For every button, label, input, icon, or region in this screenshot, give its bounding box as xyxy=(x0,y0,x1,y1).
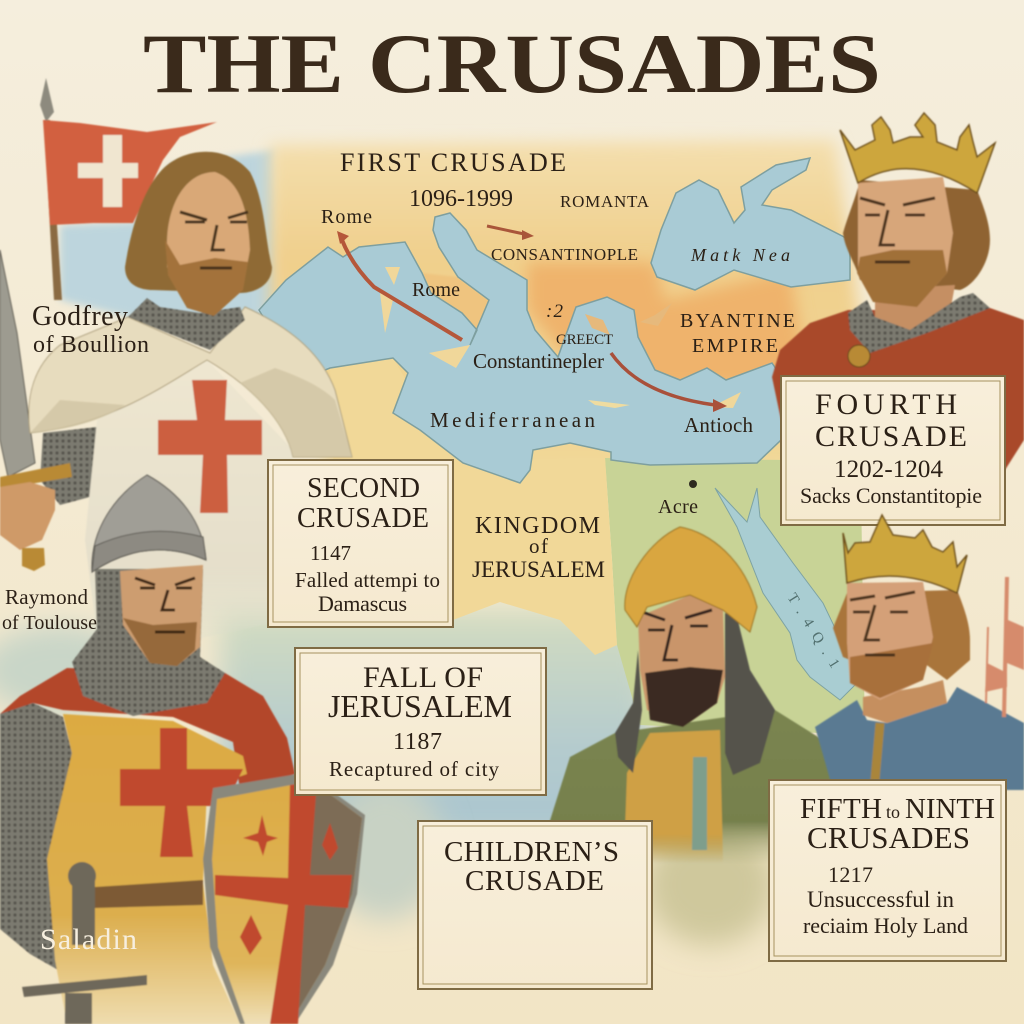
sword xyxy=(22,862,147,1024)
shield stars xyxy=(240,815,338,955)
pommel xyxy=(22,548,45,571)
heading: to xyxy=(886,802,900,822)
body text: 1187 xyxy=(393,729,442,755)
collar xyxy=(848,293,990,353)
label: Rome xyxy=(321,206,372,228)
body text: 1202-1204 xyxy=(834,456,944,483)
body text: Damascus xyxy=(318,591,407,616)
label: Acre xyxy=(658,496,698,518)
body text: 1217 xyxy=(828,862,873,887)
heading xyxy=(800,793,995,855)
red cape xyxy=(0,668,295,790)
flag pole xyxy=(44,120,62,300)
name: Raymond xyxy=(2,585,97,634)
body text: Recaptured of city xyxy=(329,757,500,781)
beard xyxy=(645,667,723,727)
beard xyxy=(165,240,248,316)
arrow head: central xyxy=(522,230,534,240)
body text xyxy=(803,862,968,938)
rope xyxy=(875,723,880,780)
blue cape xyxy=(815,687,1024,790)
body text: Falled attempi to xyxy=(295,568,440,592)
heading xyxy=(815,388,967,453)
robe centre xyxy=(625,730,723,863)
eyes and brows xyxy=(180,212,248,268)
label: GREECT xyxy=(556,332,613,348)
map: Mediterranean sea xyxy=(259,213,781,483)
hood left xyxy=(615,650,642,773)
arrow: route to Antioch xyxy=(611,353,715,405)
shield xyxy=(203,772,365,1024)
body text xyxy=(295,541,440,616)
flag cross xyxy=(78,135,138,207)
clasp xyxy=(848,345,870,367)
name: Raymond: of Toulouse xyxy=(2,612,97,634)
name: Raymond: Raymond xyxy=(5,585,88,609)
tunic xyxy=(85,360,293,660)
figure: Godfrey of Bouillon xyxy=(0,78,352,660)
crown xyxy=(843,515,967,593)
map: orange north xyxy=(527,262,810,390)
neck xyxy=(863,680,947,723)
map labels xyxy=(321,148,842,671)
label: 1096-1999 xyxy=(409,186,513,212)
map: Aegean land xyxy=(585,303,672,335)
heading: CHILDREN’S xyxy=(444,836,619,868)
panel: fifth to ninth crusades xyxy=(769,780,1006,961)
face xyxy=(638,595,725,727)
label: Matk Nea xyxy=(690,245,790,265)
red cross xyxy=(158,380,262,513)
heading xyxy=(297,473,429,534)
panel: second crusade xyxy=(268,460,453,627)
cloak xyxy=(29,307,352,457)
body text: Sacks Constantitopie xyxy=(800,483,982,508)
label: EMPIRE xyxy=(692,335,778,357)
label: BYANTINE xyxy=(680,310,795,332)
label: KINGDOM xyxy=(475,513,600,539)
arrow: route to Rome xyxy=(342,240,462,340)
crown xyxy=(840,113,995,193)
label: Rome xyxy=(412,279,460,301)
map: land xyxy=(270,140,860,480)
panel: fall of jerusalem xyxy=(295,648,546,795)
figure: top right king xyxy=(772,113,1024,470)
face xyxy=(858,177,953,307)
neck xyxy=(875,285,955,332)
beard xyxy=(850,643,933,698)
map: Sicily and islands xyxy=(380,267,470,368)
sword hilt xyxy=(0,463,72,489)
eyes xyxy=(850,592,915,655)
hair xyxy=(843,180,990,290)
arrow head: Antioch xyxy=(713,399,727,412)
face xyxy=(847,582,933,700)
map: kingdom land xyxy=(330,358,617,655)
title: THE CRUSADES xyxy=(143,17,881,111)
cloak shading xyxy=(30,368,352,457)
heading: CRUSADE xyxy=(297,503,429,534)
heading: FIFTH xyxy=(800,793,882,825)
heading: CRUSADE xyxy=(815,420,967,453)
sword blade xyxy=(0,250,35,477)
body text xyxy=(329,729,500,781)
cape xyxy=(772,308,1024,470)
heading: CRUSADE xyxy=(465,865,604,897)
label: CONSANTINOPLE xyxy=(491,245,638,264)
heading: FOURTH xyxy=(815,388,957,421)
face xyxy=(167,172,250,313)
eyes xyxy=(135,578,195,632)
hair xyxy=(833,590,970,680)
hair xyxy=(125,152,272,293)
heading xyxy=(444,836,619,897)
helmet band xyxy=(92,531,206,572)
name: Godfrey: of Boullion xyxy=(33,332,149,358)
surcoat cross xyxy=(120,728,243,857)
figure: knight with helmet xyxy=(0,475,365,1024)
robe stripe xyxy=(692,757,707,850)
chain arm xyxy=(40,427,97,505)
face xyxy=(120,565,203,666)
label: ROMANTA xyxy=(560,192,650,211)
helmet xyxy=(92,475,206,572)
map: orange peninsula xyxy=(422,273,515,343)
eyes xyxy=(860,198,935,262)
heading xyxy=(328,661,512,724)
chain arm xyxy=(0,703,100,975)
chain collar xyxy=(128,298,245,350)
label: Antioch xyxy=(684,413,754,437)
eyes xyxy=(642,610,712,660)
label: Constantinepler xyxy=(473,349,604,373)
map xyxy=(60,140,865,735)
label: Mediferranean xyxy=(430,408,596,432)
body text: reciaim Holy Land xyxy=(803,913,968,938)
label: FIRST CRUSADE xyxy=(340,148,566,177)
heading: NINTH xyxy=(905,793,995,825)
surcoat xyxy=(47,714,247,1024)
flag xyxy=(43,120,217,225)
label: T.4Q.1 xyxy=(784,591,842,671)
name: Godfrey xyxy=(32,301,149,358)
shield dark quarter xyxy=(272,781,362,1024)
robe xyxy=(540,710,835,865)
name: Saladin: Saladin xyxy=(40,923,137,956)
hand xyxy=(0,482,55,550)
heading: SECOND xyxy=(307,473,420,504)
hood right xyxy=(725,613,775,775)
arrow head: Rome xyxy=(337,231,349,244)
map: Crete xyxy=(588,400,630,408)
marker: Acre xyxy=(689,480,697,488)
panel: fourth crusade xyxy=(781,376,1005,525)
body text: 1147 xyxy=(310,541,351,565)
shield cross xyxy=(215,781,352,1024)
map: Cyprus xyxy=(711,392,741,408)
map: Red Sea xyxy=(715,488,860,700)
map: sky edge xyxy=(60,150,280,320)
map: green east xyxy=(605,430,865,735)
label: of xyxy=(529,534,548,558)
heading: JERUSALEM xyxy=(328,688,512,724)
label: :2 xyxy=(546,301,564,322)
shield face xyxy=(212,781,362,1024)
beard xyxy=(857,250,947,307)
belt xyxy=(95,880,203,908)
map: Black Sea xyxy=(651,158,850,290)
figure: Saladin portrait xyxy=(540,527,835,865)
arrow: central xyxy=(487,226,524,234)
figure: bottom right king xyxy=(815,515,1024,790)
flag right xyxy=(985,577,1024,717)
beard xyxy=(123,618,197,666)
name: Godfrey: Godfrey xyxy=(32,301,128,332)
heading: CRUSADES xyxy=(807,820,970,855)
panel: children's crusade xyxy=(418,821,652,989)
body text: Unsuccessful in xyxy=(807,887,954,912)
body text xyxy=(800,456,982,508)
chain coif xyxy=(72,569,225,716)
label: JERUSALEM xyxy=(472,557,605,582)
spear tip xyxy=(40,78,54,122)
heading: FALL OF xyxy=(363,661,483,694)
turban xyxy=(625,527,757,632)
